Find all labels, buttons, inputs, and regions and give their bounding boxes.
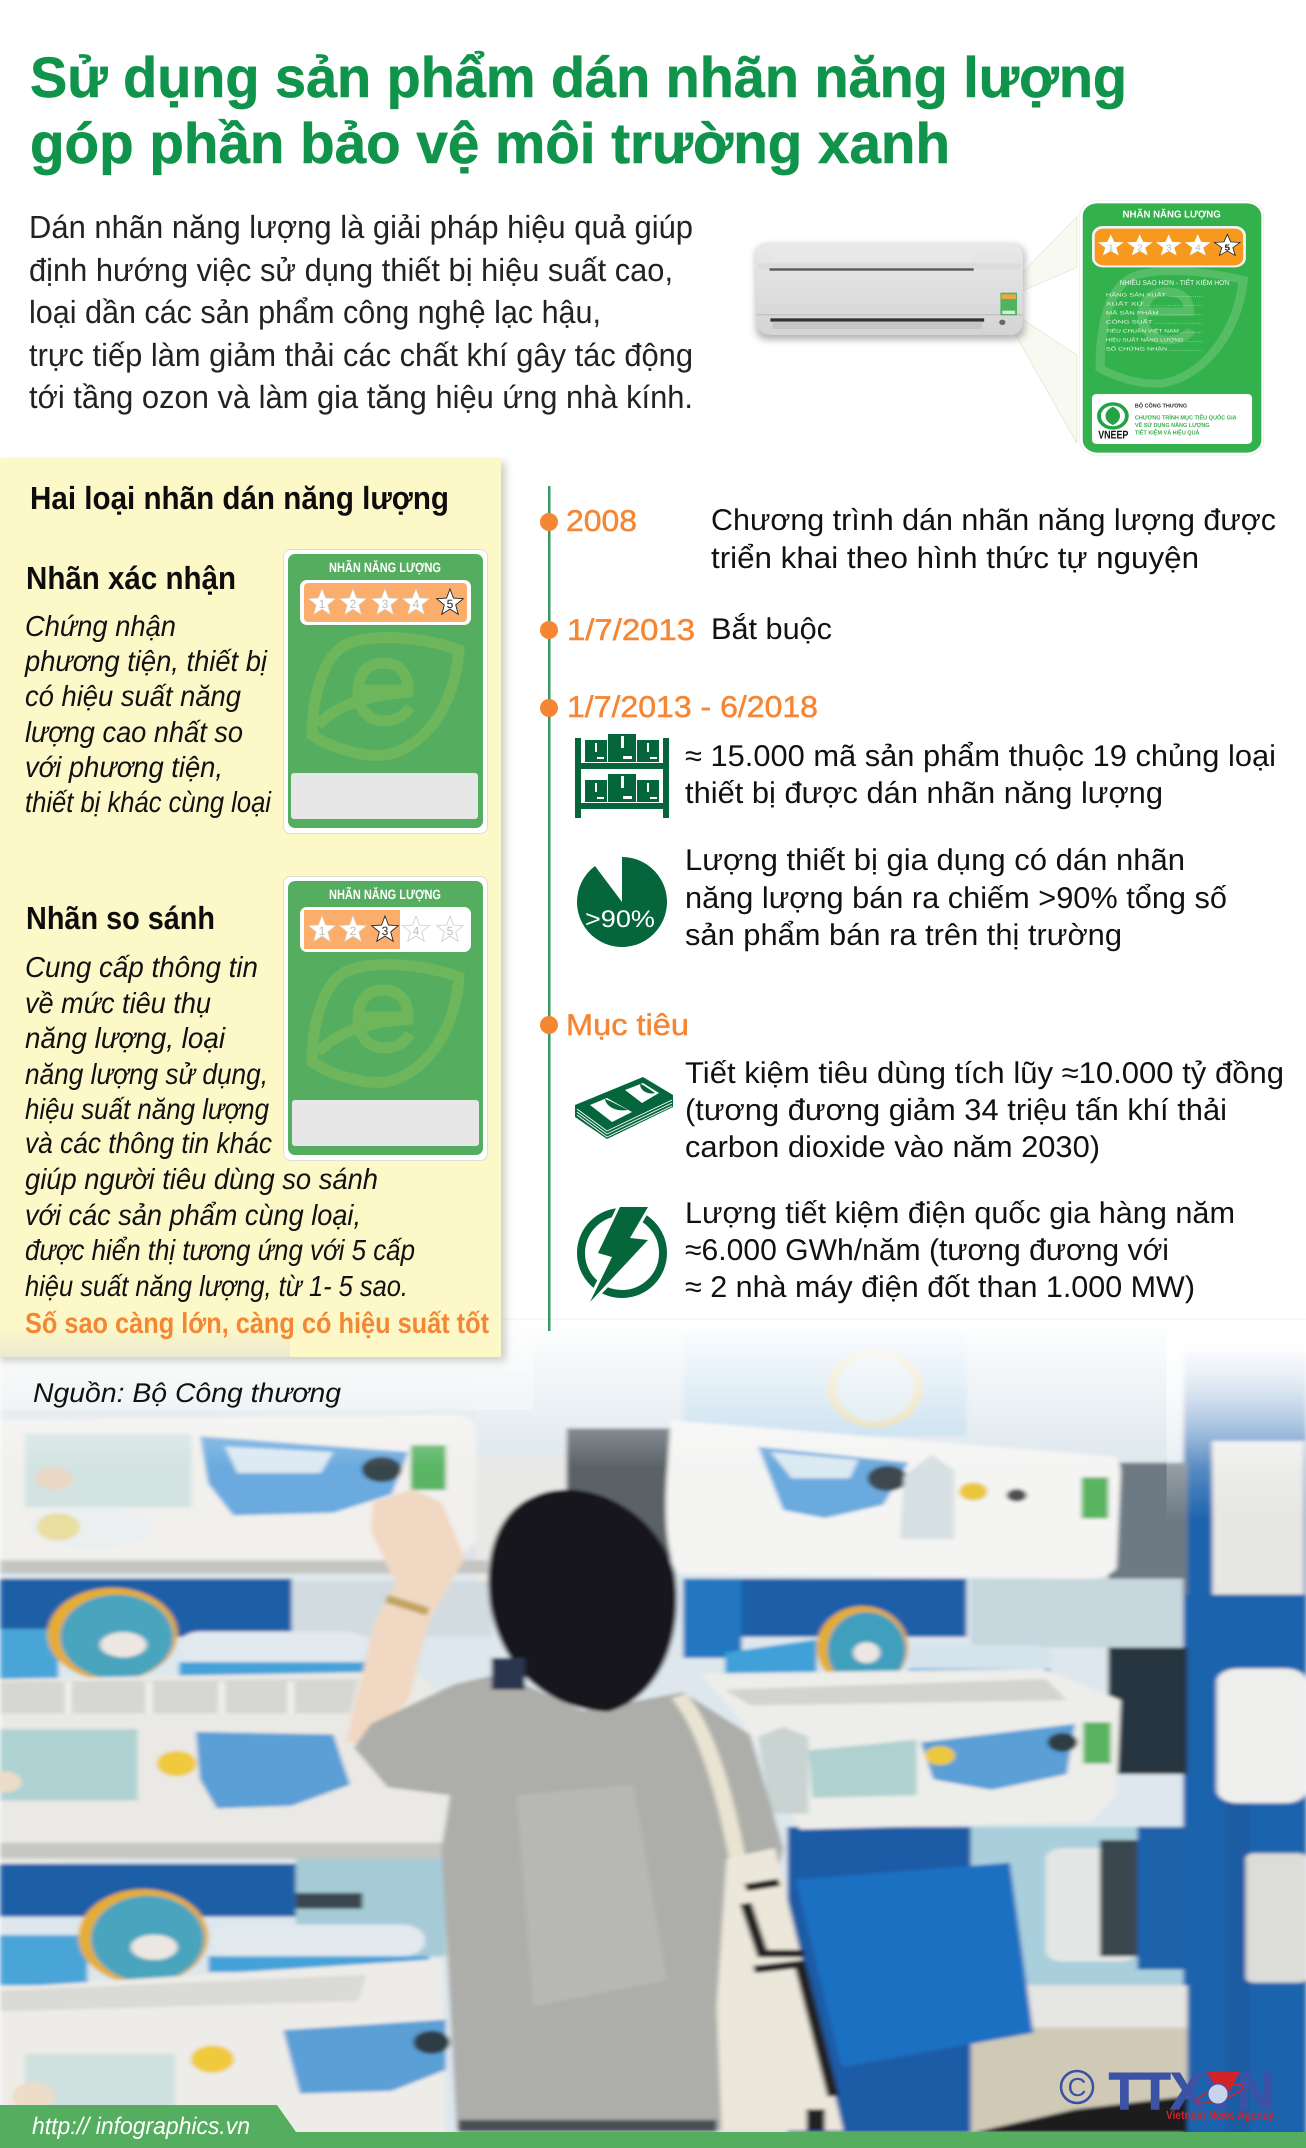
energy label: HÃNG SẢN XUẤT ................. xyxy=(1106,292,1203,298)
energy label: confirmation, 5 stars: 4 xyxy=(413,597,420,611)
energy label: confirmation, 5 stars: 1 xyxy=(319,597,326,611)
text: comparison label description: hiệu suất năng lượng xyxy=(25,1094,269,1126)
text: comparison label description xyxy=(25,952,415,1303)
photo: woman choosing air conditioners xyxy=(0,1320,1306,2148)
title: Sử dụng sản phẩm dán nhãn năng lượng xyxy=(30,46,1127,110)
energy label: confirmation, 5 stars: 3 xyxy=(382,597,389,611)
text: confirmation label description: có hiệu suất năng xyxy=(25,681,241,713)
timeline goal heading: Mục tiêu xyxy=(566,1009,689,1042)
text: share of labelled appliances: năng lượng bán ra chiếm >90% tổng số xyxy=(685,882,1227,915)
text: 15,000 models xyxy=(685,740,1276,810)
text: comparison label description: được hiển thị tương ứng với 5 cấp xyxy=(25,1235,415,1267)
logo: TTXVN: Vietnam News Agency xyxy=(1166,2108,1274,2122)
intro text block: định hướng việc sử dụng thiết bị hiệu suất cao, xyxy=(29,252,673,288)
energy label: confirmation, 5 stars xyxy=(284,550,488,834)
energy label: CÔNG SUẤT ...................... xyxy=(1106,319,1203,325)
intro text block: Dán nhãn năng lượng là giải pháp hiệu quả giúp xyxy=(29,209,693,245)
source note: Nguồn: Bộ Công thương xyxy=(33,1378,341,1408)
energy label: VNEEP xyxy=(1098,428,1128,441)
text: confirmation label description: thiết bị khác cùng loại xyxy=(25,787,272,819)
air conditioner with energy label callout xyxy=(756,201,1264,455)
energy label: comparison, 3 stars: 2 xyxy=(350,924,357,938)
title: góp phần bảo vệ môi trường xanh xyxy=(30,112,950,176)
text: electricity goal xyxy=(685,1197,1235,1304)
energy label: 1 xyxy=(1108,243,1114,253)
energy label: 3 xyxy=(1166,243,1172,253)
text: share of labelled appliances: sản phẩm bán ra trên thị trường xyxy=(685,919,1122,952)
text: share of labelled appliances: Lượng thiết bị gia dụng có dán nhãn xyxy=(685,844,1185,877)
text: electricity goal: Lượng tiết kiệm điện quốc gia hàng năm xyxy=(685,1197,1235,1230)
intro text block xyxy=(29,209,693,415)
energy label: NHÃN NĂNG LƯỢNG xyxy=(1123,208,1221,220)
energy label: comparison, 3 stars: 5 xyxy=(447,924,454,938)
energy label: SỐ CHỨNG NHẬN ................. xyxy=(1106,346,1203,352)
timeline 1/7/2013: 1/7/2013 xyxy=(567,614,695,647)
energy label: 4 xyxy=(1195,243,1201,253)
text: savings goal: Tiết kiệm tiêu dùng tích lũy ≈10.000 tỷ đồng xyxy=(685,1057,1284,1090)
energy label: CHƯƠNG TRÌNH MỤC TIÊU QUỐC GIA xyxy=(1135,414,1237,421)
text: share of labelled appliances xyxy=(685,844,1227,952)
timeline 1/7/2013: Bắt buộc xyxy=(711,612,832,646)
logo: TTXVN: TTXVN xyxy=(1109,2063,1274,2121)
energy label: VỀ SỬ DỤNG NĂNG LƯỢNG xyxy=(1135,421,1210,428)
callout rays xyxy=(1002,217,1077,443)
timeline 2008: Chương trình dán nhãn năng lượng được xyxy=(711,504,1276,537)
energy label: TIẾT KIỆM VÀ HIỆU QUẢ xyxy=(1135,429,1199,436)
text: confirmation label description xyxy=(24,611,272,819)
text: comparison label description: hiệu suất năng lượng, từ 1- 5 sao. xyxy=(25,1271,408,1303)
heading: confirmation label: Nhãn xác nhận xyxy=(26,560,236,596)
text: savings goal: (tương đương giảm 34 triệu tấn khí thải xyxy=(685,1094,1227,1127)
timeline xyxy=(540,486,1284,1331)
energy label: comparison, 3 stars xyxy=(284,876,488,1160)
intro text block: trực tiếp làm giảm thải các chất khí gây tác động xyxy=(29,337,693,373)
energy label: XUẤT XỨ ........................ xyxy=(1106,301,1203,307)
energy label: NHIỀU SAO HƠN - TIẾT KIỆM HƠN xyxy=(1120,279,1230,287)
text: 15,000 models: thiết bị được dán nhãn năng lượng xyxy=(685,777,1163,810)
energy label: comparison, 3 stars: 1 xyxy=(319,924,326,938)
icon: stack of money xyxy=(575,1077,673,1139)
intro text block: loại dần các sản phẩm công nghệ lạc hậu, xyxy=(29,294,601,330)
text: 15,000 models: ≈ 15.000 mã sản phẩm thuộc 19 chủng loại xyxy=(685,740,1276,773)
timeline 1/7/2013 - 6/2018: 1/7/2013 - 6/2018 xyxy=(567,691,818,724)
text: confirmation label description: với phương tiện, xyxy=(25,752,223,784)
energy label: confirmation, 5 stars: NHÃN NĂNG LƯỢNG xyxy=(329,559,441,575)
icon: pie chart over 90 percent: >90% xyxy=(585,906,655,933)
energy label xyxy=(1080,201,1264,455)
panel: two types of energy labels xyxy=(0,458,506,1361)
text: comparison label description: và các thông tin khác xyxy=(25,1128,272,1160)
text: comparison label description: năng lượng, loại xyxy=(25,1023,226,1055)
energy label: 5 xyxy=(1225,243,1230,253)
text: comparison label description: về mức tiêu thụ xyxy=(25,988,211,1020)
heading: comparison label: Nhãn so sánh xyxy=(26,900,215,936)
energy label: confirmation, 5 stars: 2 xyxy=(350,597,357,611)
footer band with url xyxy=(0,2105,1306,2148)
energy label: MÃ SẢN PHẨM .................... xyxy=(1106,310,1203,316)
highlight: more stars better efficiency: Số sao càng lớn, càng có hiệu suất tốt xyxy=(25,1308,489,1340)
icon: air conditioner xyxy=(756,243,1025,340)
text: electricity goal: ≈ 2 nhà máy điện đốt than 1.000 MW) xyxy=(685,1271,1195,1304)
logo: TTXVN: C xyxy=(1068,2072,1086,2102)
text: confirmation label description: phương tiện, thiết bị xyxy=(24,646,268,678)
intro text block: tới tầng ozon và làm gia tăng hiệu ứng nhà kính. xyxy=(29,379,693,415)
energy label: TIÊU CHUẨN VIỆT NAM ............ xyxy=(1106,328,1203,334)
energy label: 2 xyxy=(1137,243,1143,253)
text: confirmation label description: lượng cao nhất so xyxy=(25,717,243,749)
icon: shelves with boxes xyxy=(575,734,669,818)
timeline 2008 xyxy=(540,504,1276,575)
panel heading: Hai loại nhãn dán năng lượng xyxy=(30,480,449,516)
title xyxy=(30,46,1127,176)
icon: lightning bolt in ring xyxy=(581,1207,663,1302)
text: comparison label description: với các sản phẩm cùng loại, xyxy=(25,1200,361,1232)
timeline 2008: triển khai theo hình thức tự nguyện xyxy=(711,542,1199,575)
text: savings goal: carbon dioxide vào năm 2030) xyxy=(685,1131,1100,1164)
text: comparison label description: giúp người tiêu dùng so sánh xyxy=(25,1164,378,1196)
energy label: comparison, 3 stars: 3 xyxy=(382,924,389,938)
text: savings goal xyxy=(685,1057,1284,1164)
text: confirmation label description: Chứng nhận xyxy=(25,611,176,643)
text: electricity goal: ≈6.000 GWh/năm (tương đương với xyxy=(685,1234,1169,1267)
energy label: comparison, 3 stars: NHÃN NĂNG LƯỢNG xyxy=(329,886,441,902)
text: comparison label description: Cung cấp thông tin xyxy=(25,952,258,984)
footer band with url: http:// infographics.vn xyxy=(32,2113,250,2140)
energy label: BỘ CÔNG THƯƠNG xyxy=(1135,402,1187,409)
energy label: comparison, 3 stars: 4 xyxy=(413,924,420,938)
text: comparison label description: năng lượng sử dụng, xyxy=(25,1059,268,1091)
timeline 1/7/2013 xyxy=(540,612,832,647)
energy label: confirmation, 5 stars: 5 xyxy=(447,597,454,611)
energy label: HIỆU SUẤT NĂNG LƯỢNG .......... xyxy=(1106,337,1203,343)
timeline 2008: 2008 xyxy=(566,505,637,538)
icon: pie chart over 90 percent xyxy=(577,857,667,947)
